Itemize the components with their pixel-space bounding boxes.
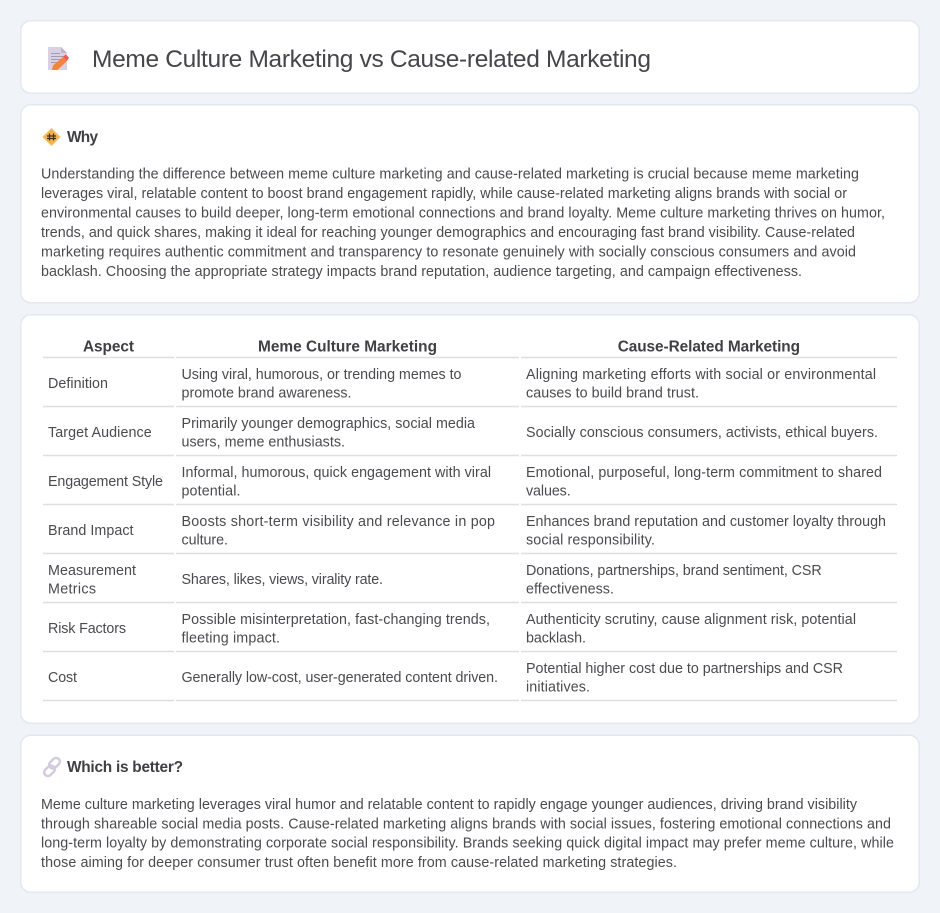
row: cost: initiatives. [526, 679, 590, 695]
row: cost: Cost [48, 670, 77, 686]
heading: which is better: Which is better? [67, 759, 183, 776]
panel: title card [21, 21, 919, 93]
text block: which is better [41, 797, 894, 871]
row: definition: Definition [48, 376, 108, 392]
row: risk factors: Authenticity scrutiny, cause alignment risk, potential [526, 612, 856, 628]
row: target audience: Target Audience [48, 425, 152, 441]
table header: Cause-Related Marketing [618, 339, 800, 356]
icon: warning diamond [43, 128, 60, 146]
row: measurement metrics: Shares, likes, views, virality rate. [182, 572, 383, 588]
row: cost [48, 661, 843, 695]
row: definition: Aligning marketing efforts with social or environmental [526, 367, 876, 383]
row: engagement style [48, 465, 882, 499]
text block: why: backlash. Choosing the appropriate strategy impacts brand reputation, audience targeting, and campaign effectiveness. [41, 264, 802, 280]
row: target audience: Primarily younger demographics, social media [182, 416, 475, 432]
text block: which is better: through shareable social media posts. Cause-related marketing aligns brands with social issues, fostering emotional connections and [41, 816, 891, 832]
text block: which is better: those aiming for deeper consumer trust often benefit more from cause-related marketing strategies. [41, 855, 677, 871]
row: measurement metrics: Donations, partnerships, brand sentiment, CSR [526, 563, 822, 579]
text block: why: environmental causes to build deeper, long-term emotional connections and brand loyalty. Meme culture marketing thrives on humor, [41, 206, 885, 222]
row: engagement style: Informal, humorous, quick engagement with viral [182, 465, 491, 481]
row: engagement style: values. [526, 483, 571, 499]
row: risk factors [48, 612, 856, 646]
panel: which is better [21, 735, 919, 892]
title: Meme Culture Marketing vs Cause-related Marketing [92, 46, 651, 73]
text block: why: leverages viral, relatable content to boost brand engagement rapidly, while cause-related marketing aligns brands with social or [41, 186, 847, 202]
table header: Meme Culture Marketing [258, 339, 437, 356]
icon: memo with pencil [48, 47, 69, 70]
panel: why [21, 105, 919, 303]
row: definition: promote brand awareness. [182, 385, 352, 401]
row: risk factors: Risk Factors [48, 621, 126, 637]
text block: why: Understanding the difference between meme culture marketing and cause-related marketing is crucial because meme marketing [41, 166, 859, 182]
row: brand impact: Boosts short-term visibility and relevance in pop [182, 514, 495, 530]
row: risk factors: Possible misinterpretation, fast-changing trends, [182, 612, 490, 628]
row: measurement metrics: Measurement [48, 563, 136, 579]
panel: comparison table [21, 315, 919, 723]
row: risk factors: fleeting impact. [182, 630, 280, 646]
row: brand impact: social responsibility. [526, 532, 655, 548]
row: definition [48, 367, 876, 401]
row: engagement style: Engagement Style [48, 474, 163, 490]
row: engagement style: potential. [182, 483, 240, 499]
text block: which is better: Meme culture marketing leverages viral humor and relatable content to rapidly engage younger audiences, driving brand visibility [41, 797, 858, 813]
table header: Aspect [83, 339, 134, 356]
row: brand impact: Enhances brand reputation and customer loyalty through [526, 514, 886, 530]
row: definition: causes to build brand trust. [526, 385, 699, 401]
table rules [43, 358, 897, 700]
row: definition: Using viral, humorous, or trending memes to [182, 367, 462, 383]
text block: why [41, 166, 885, 280]
row: brand impact: Brand Impact [48, 523, 134, 539]
row: engagement style: Emotional, purposeful, long-term commitment to shared [526, 465, 882, 481]
row: brand impact: culture. [182, 532, 228, 548]
text block: why: marketing requires authentic commitment and transparency to resonate genuinely with socially conscious consumers and avoid [41, 244, 856, 260]
row: target audience: Socially conscious consumers, activists, ethical buyers. [526, 425, 878, 441]
text block: why: trends, and quick shares, making it ideal for reaching younger demographics and encouraging fast brand visibility. Cause-related [41, 225, 855, 241]
row: measurement metrics: Metrics [48, 581, 96, 597]
row: cost: Generally low-cost, user-generated content driven. [182, 670, 498, 686]
row: measurement metrics [48, 563, 822, 597]
row: measurement metrics: effectiveness. [526, 581, 614, 597]
text block: which is better: long-term loyalty by demonstrating corporate social responsibility. Brands seeking quick digital impact may prefer meme culture, while [41, 836, 894, 852]
row: risk factors: backlash. [526, 630, 586, 646]
row: cost: Potential higher cost due to partnerships and CSR [526, 661, 843, 677]
table header [83, 339, 800, 356]
row: target audience: users, meme enthusiasts. [182, 434, 345, 450]
icon: link [43, 756, 61, 778]
heading: why: Why [67, 129, 98, 146]
row: brand impact [48, 514, 886, 548]
row: target audience [48, 416, 878, 450]
